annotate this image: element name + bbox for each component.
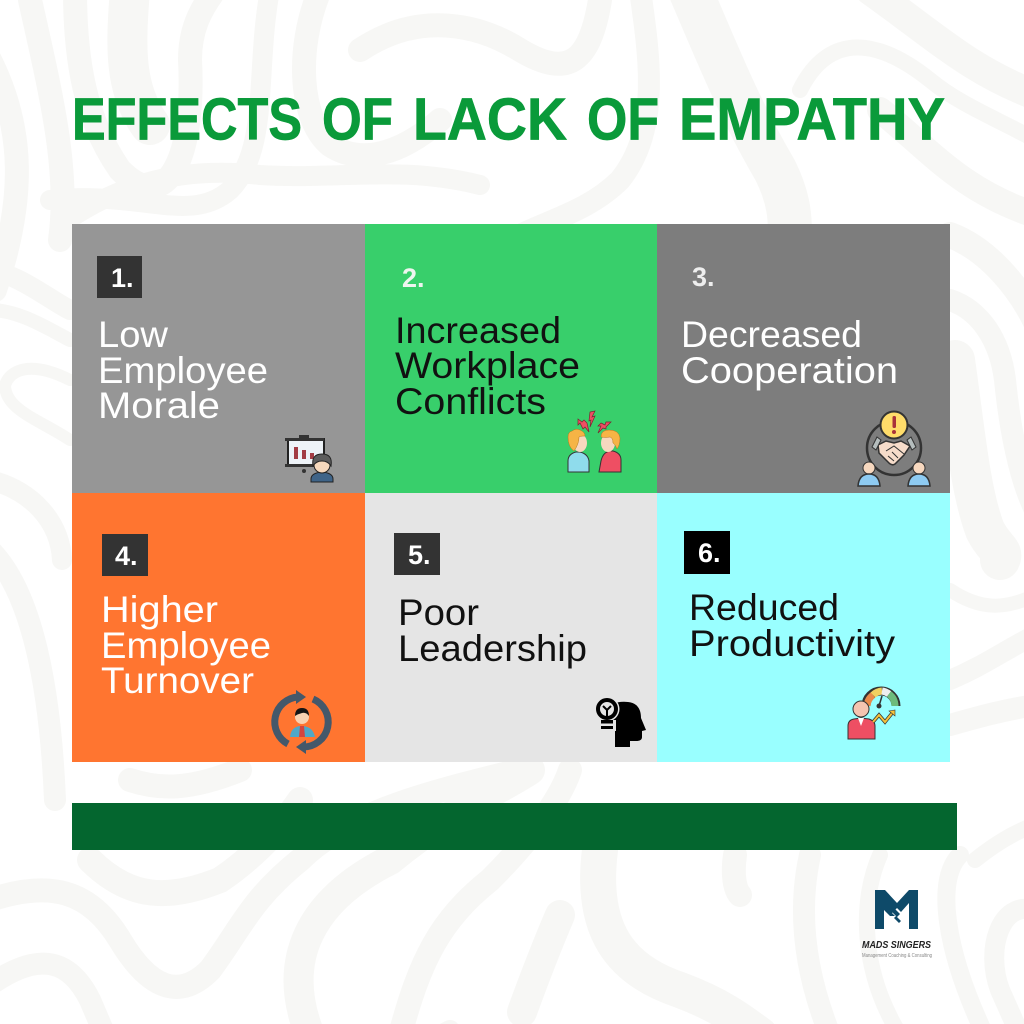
text: higher employee turnover: Higher (101, 589, 218, 630)
icon: presenter with chart (285, 435, 333, 482)
logo: mads singers: MADS SINGERS (862, 939, 931, 951)
icon: head with light bulb (594, 696, 646, 747)
number badge 5: 5. (408, 540, 431, 570)
panel: 4 higher employee turnover (72, 493, 365, 762)
text: low employee morale: Low (98, 314, 168, 355)
text: poor leadership: Leadership (398, 628, 587, 669)
text: higher employee turnover: Turnover (101, 660, 254, 701)
text: decreased cooperation: Decreased (681, 314, 862, 355)
logo: mads singers: Management Coaching & Consulting (862, 953, 932, 959)
panel: 1 low employee morale (72, 224, 365, 493)
title: EFFECTS (72, 86, 302, 152)
title: EMPATHY (679, 86, 945, 152)
text: low employee morale: Employee (98, 350, 268, 391)
number badge 4 (102, 534, 148, 576)
text: poor leadership: Poor (398, 592, 479, 633)
text: increased workplace conflicts: Workplace (395, 345, 580, 386)
icon: productivity gauge and person (848, 691, 896, 739)
text: reduced productivity: Reduced (689, 587, 839, 628)
green banner bar (72, 803, 957, 850)
text: reduced productivity: Productivity (689, 623, 896, 664)
text: increased workplace conflicts: Increased (395, 310, 561, 351)
title: OF (322, 86, 393, 152)
icon: two people arguing (568, 411, 621, 472)
number badge 6 (684, 531, 730, 574)
text: higher employee turnover: Employee (101, 625, 271, 666)
number badge 5 (394, 533, 440, 575)
text: poor leadership (398, 592, 587, 669)
logo: mads singers (862, 890, 932, 959)
text: increased workplace conflicts: Conflicts (395, 381, 546, 422)
text: decreased cooperation: Cooperation (681, 350, 898, 391)
icon: handshake with alert (858, 412, 930, 486)
title: LACK (413, 86, 567, 152)
text: reduced productivity (689, 587, 896, 664)
number badge 4: 4. (115, 541, 138, 571)
number 2: 2. (402, 263, 425, 293)
number badge 1: 1. (111, 263, 134, 293)
text: decreased cooperation (681, 314, 898, 391)
panel: 6 reduced productivity (657, 493, 950, 762)
number 3: 3. (692, 262, 715, 292)
text: increased workplace conflicts (395, 310, 580, 422)
panel: 2 increased workplace conflicts (365, 224, 657, 493)
icon: employee turnover cycle (275, 690, 328, 754)
panel: 5 poor leadership (365, 493, 657, 762)
text: low employee morale: Morale (98, 385, 220, 426)
number badge 6: 6. (698, 538, 721, 568)
text: higher employee turnover (101, 589, 271, 701)
number badge 1 (97, 256, 142, 298)
panel: 3 decreased cooperation (657, 224, 950, 493)
text: low employee morale (98, 314, 268, 426)
title (72, 86, 945, 152)
title: OF (587, 86, 659, 152)
